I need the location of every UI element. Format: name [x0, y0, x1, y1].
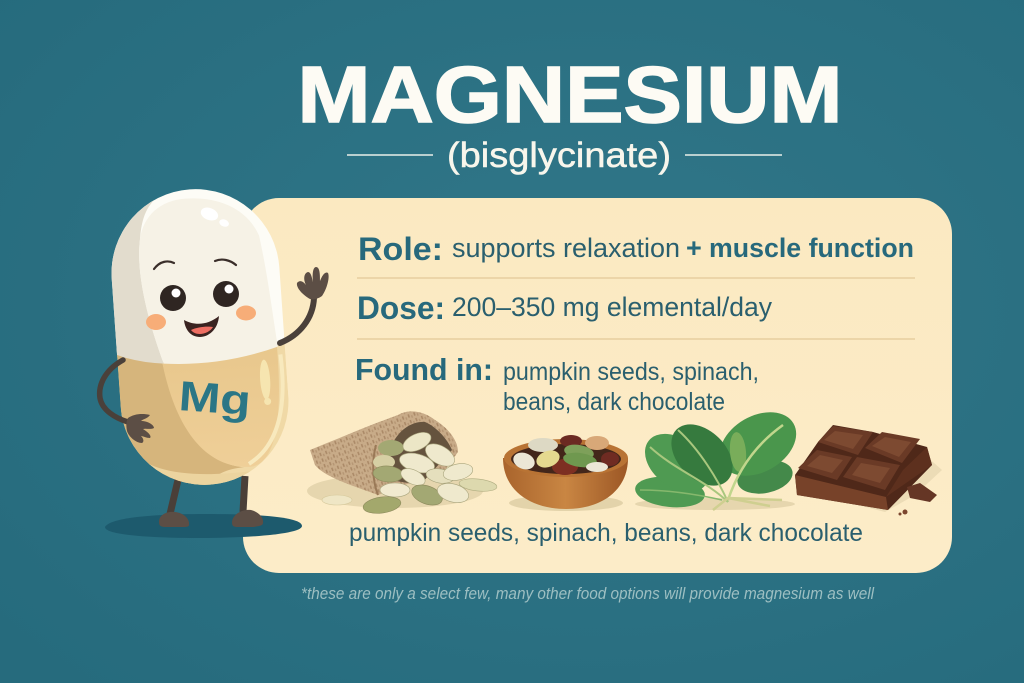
found in row: Found in: — [355, 352, 493, 387]
footnote: *these are only a select few, many other food options will provide magnesium as well — [301, 585, 875, 603]
left hand — [126, 414, 154, 443]
dose row: Dose: — [357, 290, 445, 326]
found in row: pumpkin seeds, spinach, — [503, 358, 759, 386]
role row: muscle function — [709, 233, 914, 263]
icon: spinach — [634, 399, 808, 511]
mascot: magnesium capsule — [99, 174, 329, 538]
caption: foods: pumpkin seeds, spinach, beans, dark chocolate — [349, 519, 863, 547]
found in row: beans, dark chocolate — [503, 388, 725, 416]
role row: supports relaxation — [452, 233, 680, 263]
capsule body — [116, 344, 288, 485]
panel: info card — [243, 198, 952, 573]
label: Mg: Mg — [177, 372, 252, 424]
subtitle with rules: (bisglycinate) — [447, 136, 671, 175]
left arm — [100, 360, 128, 422]
left foot — [159, 512, 189, 527]
icon: bowl of beans — [503, 435, 628, 511]
found in row — [355, 352, 759, 416]
legs — [170, 476, 245, 514]
dose row — [357, 290, 772, 326]
ground shadow — [105, 514, 302, 538]
capsule cap — [112, 189, 284, 362]
role row: + — [686, 233, 702, 263]
face — [146, 260, 256, 337]
dose row: 200–350 mg elemental/day — [452, 292, 772, 322]
icon: sack of pumpkin seeds — [307, 411, 498, 516]
title: MAGNESIUM — [298, 50, 842, 139]
waving arm — [280, 298, 314, 343]
capsule — [112, 189, 288, 485]
infographic canvas — [96, 66, 952, 602]
role row — [358, 231, 914, 267]
right foot — [232, 510, 263, 527]
icon: chocolate bar — [795, 425, 942, 516]
role row: Role: — [358, 231, 443, 267]
waving hand — [297, 267, 329, 299]
